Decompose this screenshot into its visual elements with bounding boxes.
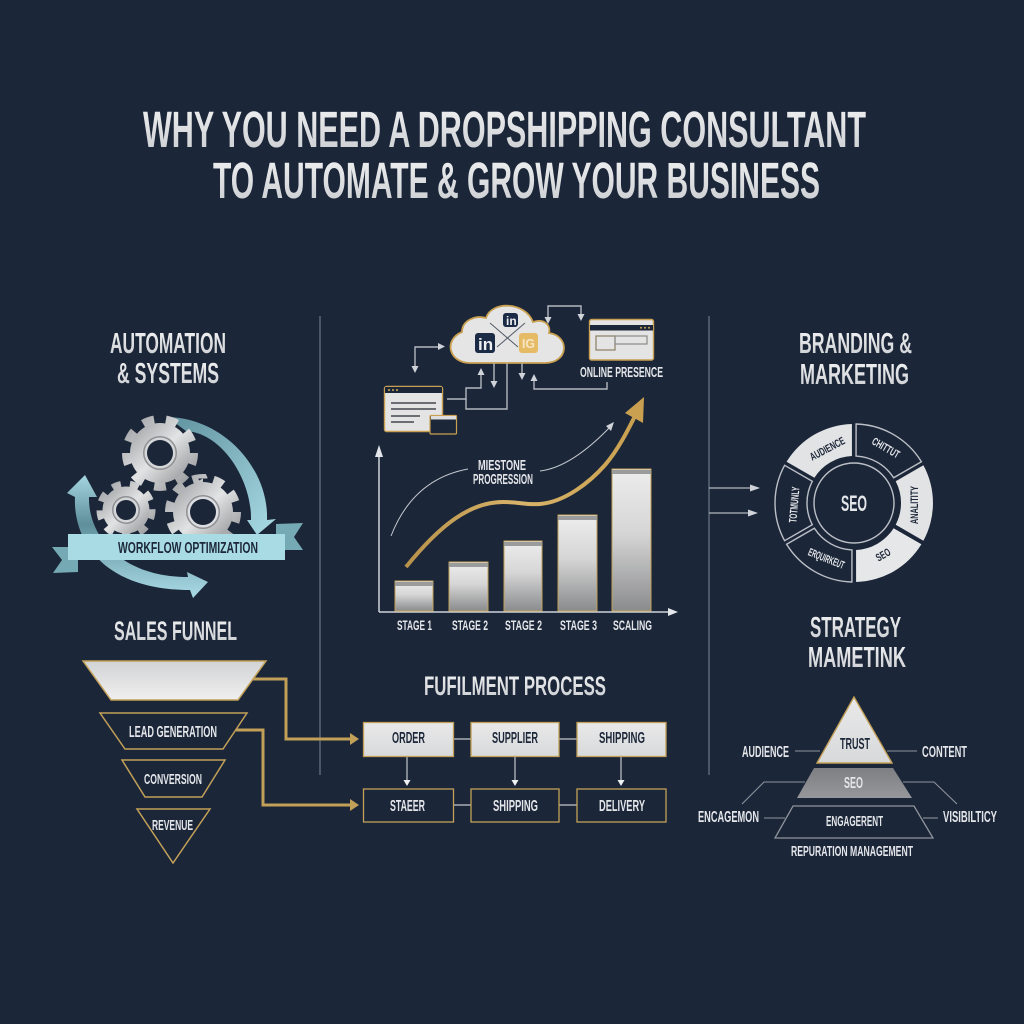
wheel centre bbox=[814, 463, 894, 543]
bar labels: STAGE 2 bbox=[452, 617, 488, 633]
title bbox=[143, 101, 866, 209]
heading: automation and systems: AUTOMATION bbox=[110, 328, 226, 360]
pyramid side labels bbox=[698, 744, 997, 826]
funnel tier: revenue: REVENUE bbox=[152, 817, 193, 834]
box: shipping second row: SHIPPING bbox=[493, 798, 538, 815]
ribbon: workflow optimization bbox=[52, 523, 303, 573]
wheel segment: community: TOTMUNLY bbox=[787, 486, 803, 523]
pyramid leader lines bbox=[742, 751, 957, 818]
bar labels bbox=[397, 617, 652, 633]
box: shipping second row bbox=[471, 789, 559, 822]
pyramid tier: engagement bbox=[775, 806, 933, 838]
panel: milestone chart bbox=[375, 397, 678, 633]
thin curved arrows bbox=[391, 422, 614, 536]
icon: browser window right bbox=[590, 320, 654, 360]
label: reputation management: REPURATION MANAGEMENT bbox=[791, 843, 913, 860]
icon: cloud: IG bbox=[522, 336, 535, 351]
heading: branding and marketing: BRANDING & bbox=[799, 328, 912, 360]
funnel tier: conversion bbox=[122, 760, 225, 797]
box: supplier: SUPPLIER bbox=[492, 730, 538, 747]
wheel segment: audience: AUDIENCE bbox=[808, 435, 847, 464]
heading: branding and marketing bbox=[799, 328, 912, 391]
funnel tier: revenue bbox=[137, 809, 210, 863]
box: staeer: STAEER bbox=[390, 798, 425, 815]
heading: strategy mametink: MAMETINK bbox=[808, 642, 906, 674]
wheel segment: seo: SEO bbox=[874, 546, 893, 564]
pyramid tier: seo: SEO bbox=[844, 775, 863, 792]
pyramid tier: trust: TRUST bbox=[840, 736, 870, 753]
wheel segment: seo bbox=[856, 528, 921, 582]
panel: fulfillment process bbox=[364, 671, 666, 822]
funnel tier: lead generation: LEAD GENERATION bbox=[129, 724, 217, 741]
icon: cloud: in bbox=[506, 314, 517, 328]
panel: online presence network bbox=[384, 306, 663, 434]
panel: sales funnel bbox=[83, 616, 359, 863]
wheel segment: engagement bbox=[787, 528, 852, 582]
wheel segment: analytics bbox=[896, 465, 933, 541]
box: order bbox=[364, 722, 454, 756]
pyramid tier: engagement: ENGAGERENT bbox=[826, 813, 883, 830]
box: shipping: SHIPPING bbox=[599, 730, 645, 747]
seo wheel diagram bbox=[775, 424, 933, 582]
bar labels: STAGE 3 bbox=[560, 617, 597, 633]
box: shipping bbox=[577, 722, 666, 756]
pyramid side labels: ENCAGEMON bbox=[698, 809, 759, 826]
heading: sales funnel: SALES FUNNEL bbox=[114, 616, 237, 646]
bar labels: STAGE 1 bbox=[397, 617, 432, 633]
heading: fulfillment process: FUFILMENT PROCESS bbox=[424, 671, 606, 701]
funnel tier: lead generation bbox=[100, 713, 247, 749]
funnel top tier bbox=[83, 661, 266, 700]
wheel centre: SEO bbox=[841, 491, 867, 516]
icon: clockwise arrow right bbox=[167, 417, 276, 535]
milestone progression label: MIESTONE bbox=[478, 457, 526, 474]
box: staeer bbox=[364, 789, 454, 822]
icon: clockwise arrow left bbox=[67, 475, 208, 598]
box: delivery bbox=[577, 789, 666, 822]
pyramid side labels: AUDIENCE bbox=[742, 744, 789, 761]
connector arrows bbox=[412, 306, 607, 409]
bar labels: SCALING bbox=[613, 617, 652, 633]
label: online presence: ONLINE PRESENCE bbox=[580, 364, 663, 381]
funnel tier: conversion: CONVERSION bbox=[144, 771, 202, 788]
wheel segment: content: CHITTUT bbox=[870, 436, 902, 461]
wheel segment: content bbox=[856, 424, 921, 478]
pyramid side labels: CONTENT bbox=[922, 744, 967, 761]
wheel segment: audience bbox=[787, 424, 852, 478]
arrow: funnel to order bbox=[253, 679, 359, 745]
bar chart bbox=[395, 469, 651, 611]
heading: automation and systems: & SYSTEMS bbox=[117, 358, 219, 390]
bar labels: STAGE 2 bbox=[505, 617, 542, 633]
pyramid tier: trust bbox=[817, 697, 892, 763]
icon: left gear bbox=[100, 484, 152, 536]
panel: strategy pyramid bbox=[698, 612, 997, 860]
wheel segment: community bbox=[775, 465, 812, 541]
milestone progression label: PROGRESSION bbox=[473, 471, 533, 488]
ribbon: workflow optimization: WORKFLOW OPTIMIZATION bbox=[118, 540, 258, 557]
milestone progression label bbox=[473, 457, 533, 488]
arrows to wheel bbox=[709, 484, 760, 516]
panel: automation and systems bbox=[52, 328, 303, 598]
icon: top gear bbox=[126, 420, 194, 486]
pyramid tier: seo bbox=[797, 768, 912, 798]
heading: strategy mametink: STRATEGY bbox=[810, 612, 901, 644]
wheel segment: engagement: ERQUIRKEUT bbox=[806, 547, 846, 572]
heading: branding and marketing: MARKETING bbox=[800, 359, 909, 391]
gold growth arrow bbox=[406, 397, 644, 567]
heading: strategy mametink bbox=[808, 612, 906, 674]
icon: browser window left bbox=[384, 386, 456, 434]
wheel segment: analytics: ANALITITY bbox=[909, 486, 921, 524]
chart axes bbox=[375, 445, 678, 616]
flow connectors bbox=[404, 739, 624, 805]
box: delivery: DELIVERY bbox=[599, 798, 645, 815]
heading: automation and systems bbox=[110, 328, 226, 390]
arrow: lead generation to staeer bbox=[236, 730, 359, 811]
box: order: ORDER bbox=[392, 730, 425, 747]
box: supplier bbox=[471, 722, 559, 756]
icon: cloud: in bbox=[478, 335, 493, 354]
panel: branding and marketing bbox=[709, 328, 933, 582]
icon: cloud bbox=[451, 306, 564, 363]
icon: right gear bbox=[170, 478, 236, 546]
